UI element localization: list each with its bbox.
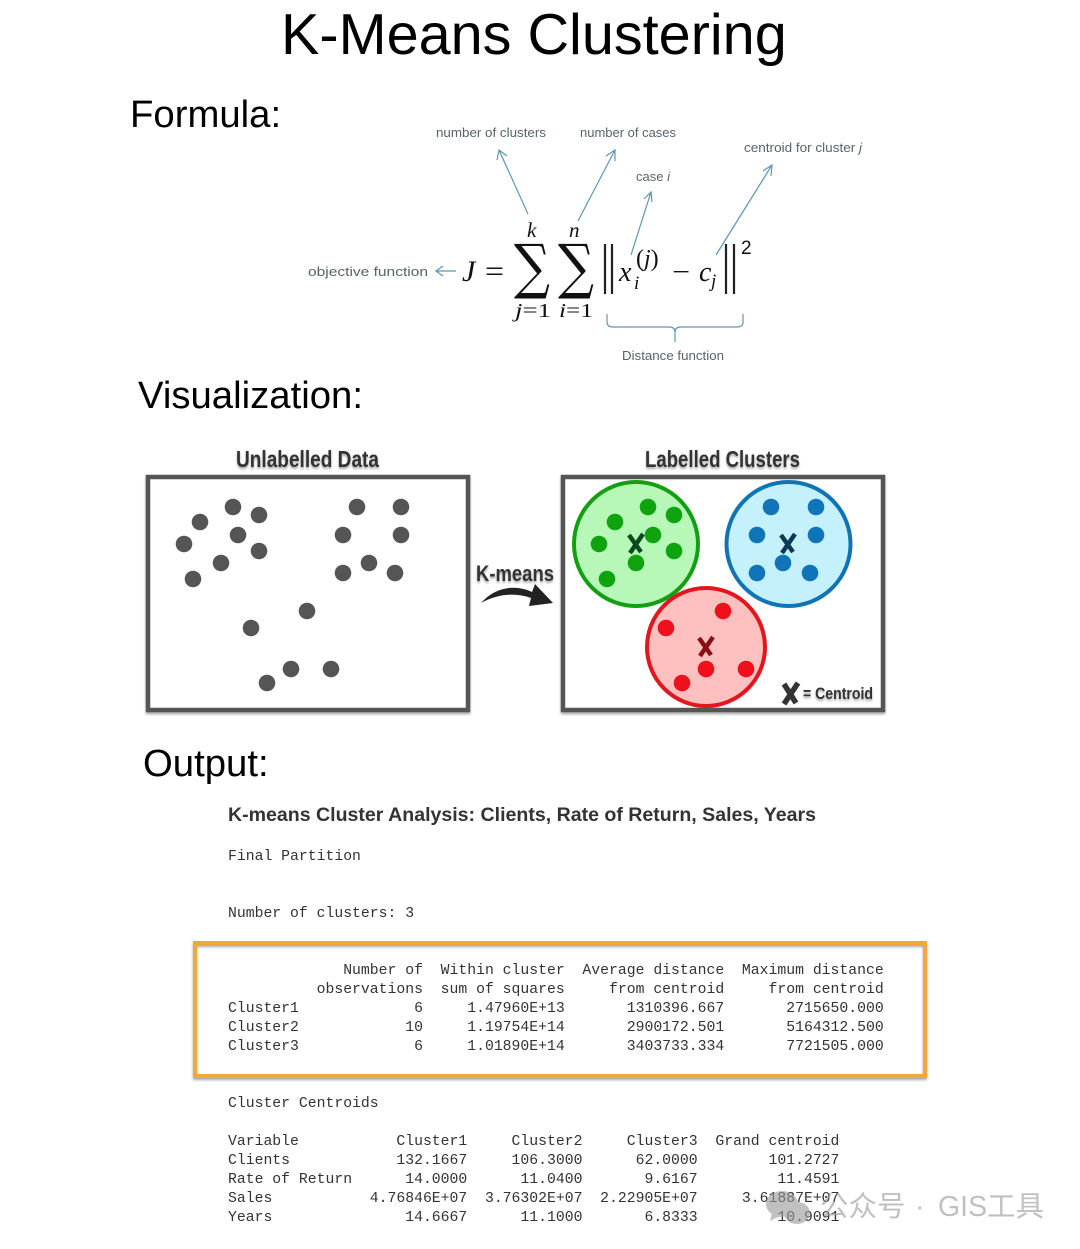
table: cluster centroids: Variable Cluster1 Cluster2 Cluster3 Grand centroid <box>228 1134 839 1150</box>
label: number of cases: number of cases <box>580 125 676 140</box>
brace: distance function <box>607 314 743 342</box>
highlight box <box>195 943 925 1076</box>
equation: j <box>708 271 716 292</box>
equation: = <box>485 255 504 288</box>
table: final partition: observations sum of squares from centroid from centroid <box>228 982 884 998</box>
equation: i=1 <box>559 300 593 322</box>
equation: ∑ <box>514 232 550 302</box>
equation: (j) <box>636 246 659 272</box>
legend: centroid: = Centroid <box>803 684 873 703</box>
table: final partition: Cluster3 6 1.01890E+14 3403733.334 7721505.000 <box>228 1039 884 1055</box>
arrow: objective function <box>436 266 456 276</box>
equation: J <box>462 255 477 288</box>
label: objective function: objective function <box>308 264 428 279</box>
arrow: k-means: K-means <box>476 561 554 586</box>
watermark: · <box>915 1191 924 1223</box>
label: distance function: Distance function <box>622 348 724 363</box>
legend: centroid <box>784 683 873 704</box>
table: cluster centroids: Years 14.6667 11.1000 6.8333 10.9091 <box>228 1210 840 1226</box>
watermark <box>766 1191 1044 1224</box>
output heading: K-means Cluster Analysis: Clients, Rate of Return, Sales, Years <box>228 804 816 826</box>
table: cluster centroids <box>228 1134 840 1226</box>
heading: output: Output: <box>143 742 269 785</box>
equation: k <box>527 218 537 242</box>
icon: chat bubbles <box>766 1191 810 1224</box>
equation: − <box>672 257 690 288</box>
table: final partition <box>228 963 884 1055</box>
arrow: case i <box>631 192 652 255</box>
arrow: k-means <box>476 561 554 606</box>
blue cluster <box>726 482 850 606</box>
label: centroid for cluster j: centroid for cluster j <box>744 140 863 155</box>
panel title: Unlabelled Data <box>236 446 379 472</box>
label: number of clusters: number of clusters <box>436 125 547 140</box>
equation: ∑ <box>558 232 594 302</box>
watermark: GIS工具 <box>938 1191 1044 1223</box>
equation: c <box>699 257 712 288</box>
equation: n <box>569 218 580 242</box>
equation: j=1 <box>511 300 551 322</box>
title: K-Means Clustering <box>281 3 787 67</box>
table: cluster centroids: Clients 132.1667 106.3000 62.0000 101.2727 <box>228 1153 839 1169</box>
arrow: number of cases <box>578 150 615 221</box>
text: final partition: Final Partition <box>228 849 361 865</box>
panel: unlabelled data <box>148 446 468 710</box>
table: final partition: Cluster1 6 1.47960E+13 1310396.667 2715650.000 <box>228 1001 884 1017</box>
label: case i: case i <box>636 169 671 184</box>
arrow: centroid <box>716 165 772 255</box>
table: final partition: Cluster2 10 1.19754E+14 2900172.501 5164312.500 <box>228 1020 884 1036</box>
text: number of clusters: Number of clusters: 3 <box>228 906 414 922</box>
green cluster <box>574 482 698 606</box>
equation: x <box>618 257 632 288</box>
equation: 2 <box>741 238 752 259</box>
table: cluster centroids: Rate of Return 14.0000 11.0400 9.6167 11.4591 <box>228 1172 840 1188</box>
equation: i <box>634 273 639 294</box>
table: cluster centroids: Sales 4.76846E+07 3.76302E+07 2.22905E+07 3.61887E+07 <box>228 1191 839 1207</box>
text: cluster centroids: Cluster Centroids <box>228 1096 379 1112</box>
panel: labelled clusters <box>563 446 883 710</box>
heading: visualization: Visualization: <box>138 374 363 417</box>
heading: formula: Formula: <box>130 93 281 136</box>
red cluster <box>647 588 765 706</box>
panel title: Labelled Clusters <box>645 446 800 472</box>
data points <box>176 499 409 691</box>
equation <box>462 218 752 322</box>
watermark: 公众号 <box>820 1191 906 1223</box>
table: final partition: Number of Within cluster Average distance Maximum distance <box>228 963 884 979</box>
formula diagram <box>308 125 863 363</box>
arrow: number of clusters <box>497 150 528 214</box>
